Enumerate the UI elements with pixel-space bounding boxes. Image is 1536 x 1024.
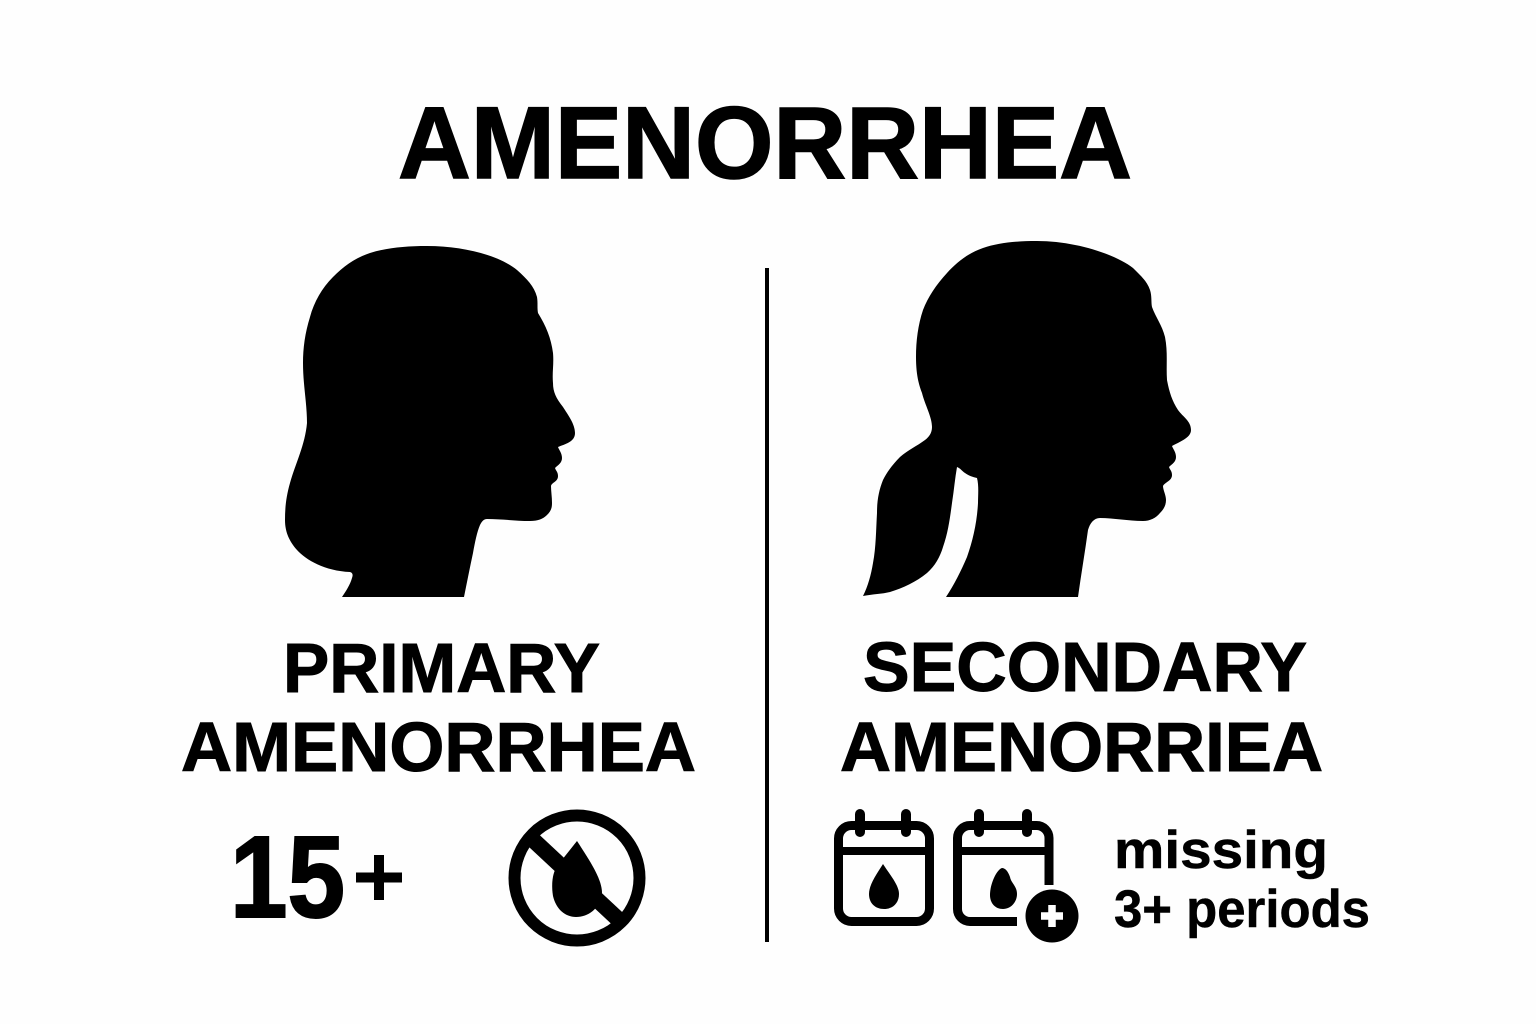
text: missing 3+ periods: 3+ periods <box>1114 880 1370 939</box>
panel: primary amenorrhea <box>181 246 696 942</box>
heading: primary amenorrhea: AMENORRHEA <box>181 708 696 786</box>
heading: secondary amenorrhea: AMENORRIEA <box>840 708 1323 786</box>
divider line <box>765 268 769 942</box>
text: missing 3+ periods: missing <box>1114 821 1328 880</box>
heading: secondary amenorrhea: SECONDARY <box>863 628 1307 706</box>
icon: no period drop <box>514 816 640 940</box>
icon: calendar with drop and plus badge <box>957 809 1078 942</box>
panel: secondary amenorrhea <box>838 241 1370 942</box>
heading: primary amenorrhea <box>181 629 696 786</box>
title: AMENORRHEA <box>398 86 1132 200</box>
silhouette: head with shoulder-length hair <box>285 246 575 597</box>
age: 15+: 15 <box>230 812 345 942</box>
silhouette: head with ponytail <box>863 241 1191 597</box>
text: missing 3+ periods <box>1114 821 1370 939</box>
heading: secondary amenorrhea <box>840 628 1323 786</box>
icon: calendar with drop <box>838 809 930 922</box>
heading: primary amenorrhea: PRIMARY <box>283 629 600 707</box>
